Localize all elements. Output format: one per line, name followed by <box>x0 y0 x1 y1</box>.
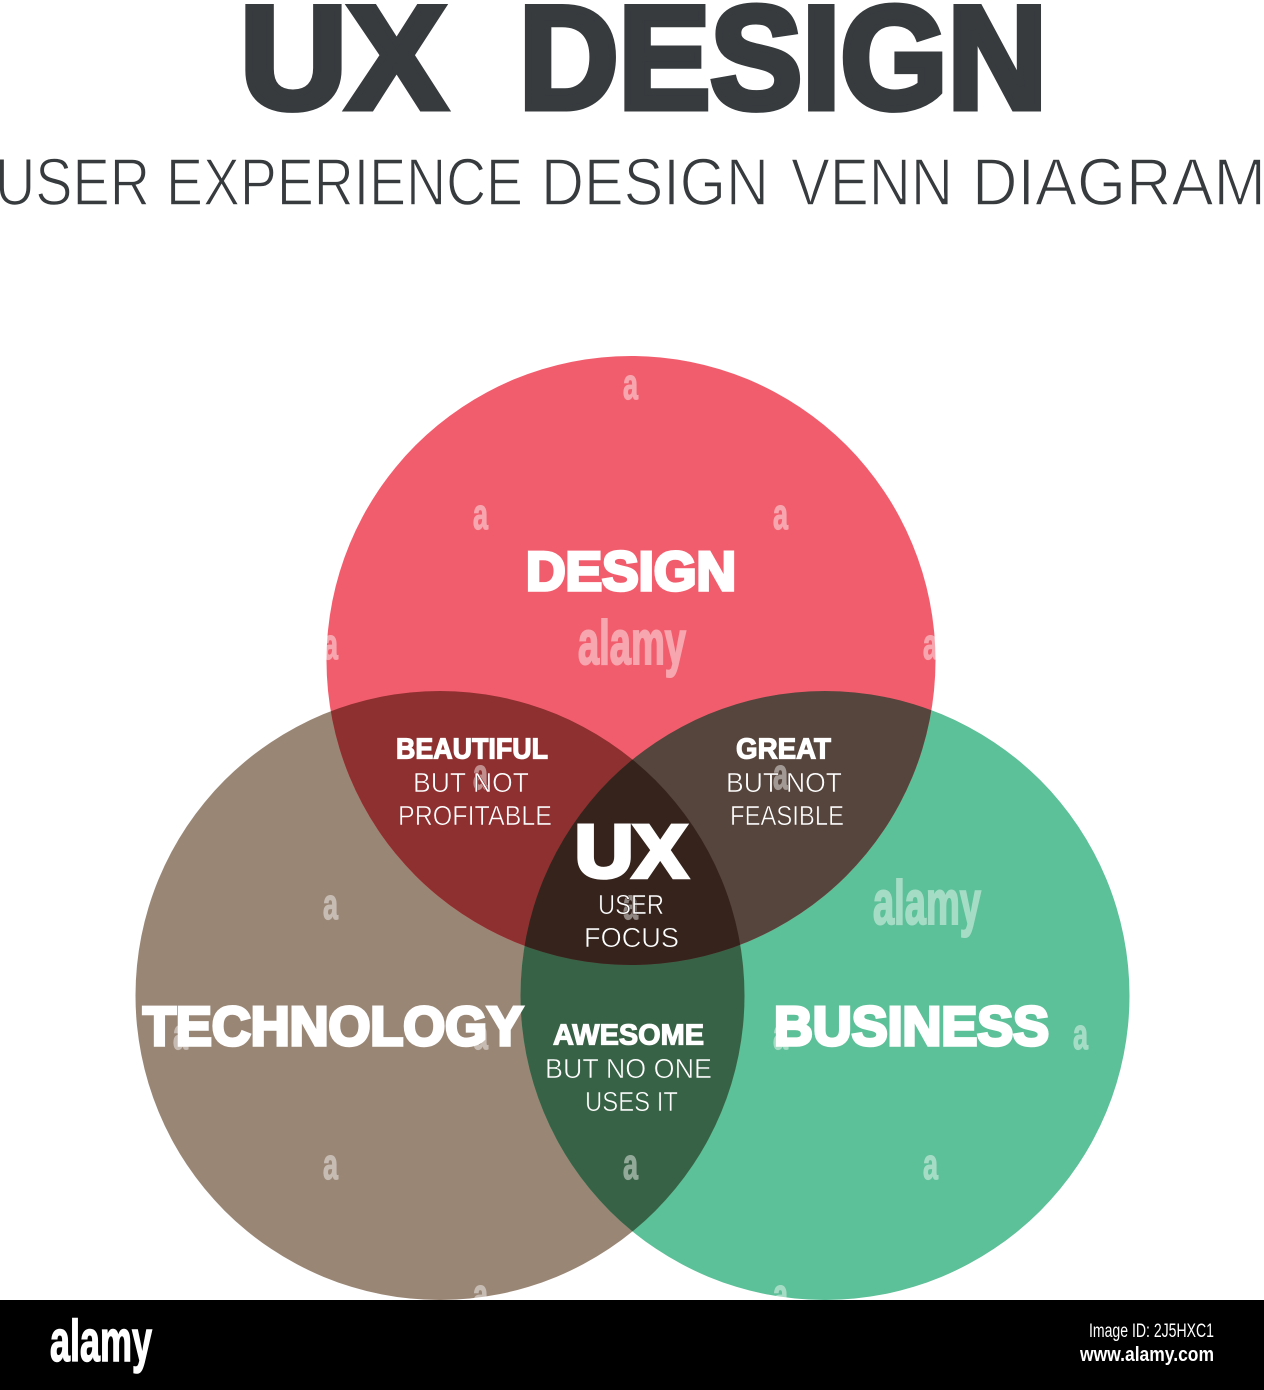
text: awesome but no one uses it: BUT NO ONE <box>545 1053 712 1084</box>
watermark pattern: alamy <box>578 609 686 678</box>
circle: business <box>520 691 1130 1300</box>
watermark pattern: a <box>473 1010 488 1059</box>
venn diagram <box>136 356 1130 1300</box>
text: UX user focus: UX <box>575 810 687 893</box>
watermark pattern: a <box>773 1010 788 1059</box>
text: UX user focus: FOCUS <box>584 922 679 953</box>
text: great but not feasible: FEASIBLE <box>730 800 844 831</box>
watermark pattern: a <box>473 750 488 799</box>
subtitle: USER <box>0 145 150 220</box>
watermark pattern: a <box>923 620 938 669</box>
subtitle: EXPERIENCE <box>166 145 523 220</box>
text: UX user focus <box>575 810 687 953</box>
text: awesome but no one uses it: USES IT <box>585 1086 678 1117</box>
watermark pattern: a <box>323 620 338 669</box>
subtitle <box>0 145 1264 220</box>
overlap: technology and business <box>520 944 744 1232</box>
watermark pattern: a <box>773 490 788 539</box>
label: business: BUSINESS <box>774 995 1049 1057</box>
watermark pattern <box>173 360 1088 1319</box>
label: design: DESIGN <box>526 540 736 602</box>
watermark pattern: a <box>923 1140 938 1189</box>
watermark pattern: a <box>623 1140 638 1189</box>
title <box>240 0 1047 139</box>
footer bar <box>0 1300 1264 1390</box>
watermark pattern: a <box>473 490 488 539</box>
text: beautiful but not profitable: BEAUTIFUL <box>396 734 548 766</box>
watermark pattern: alamy <box>873 869 981 938</box>
subtitle: DESIGN <box>541 145 769 220</box>
overlap: design and technology <box>330 691 739 965</box>
watermark pattern: a <box>323 880 338 929</box>
subtitle: VENN <box>791 145 953 220</box>
watermark pattern: a <box>773 1270 788 1319</box>
text: UX user focus: USER <box>598 889 664 920</box>
image id: Image ID: 2J5HXC1 <box>1089 1321 1214 1342</box>
website: www.alamy.com <box>1079 1344 1214 1366</box>
watermark pattern: a <box>773 750 788 799</box>
text: awesome but no one uses it <box>545 1020 712 1117</box>
text: awesome but no one uses it: AWESOME <box>553 1020 704 1052</box>
circle: technology <box>136 691 744 1300</box>
text: beautiful but not profitable <box>396 734 552 831</box>
watermark pattern: a <box>623 880 638 929</box>
watermark pattern: a <box>473 1270 488 1319</box>
overlap: design and business <box>524 691 932 946</box>
text: beautiful but not profitable: PROFITABLE <box>398 800 552 831</box>
text: great but not feasible: GREAT <box>736 734 831 766</box>
watermark pattern: a <box>1073 1010 1088 1059</box>
text: great but not feasible <box>726 734 844 831</box>
text: beautiful but not profitable: BUT NOT <box>413 767 529 798</box>
footer logo: alamy <box>50 1309 152 1374</box>
overlap: center UX <box>524 760 740 965</box>
watermark pattern: a <box>323 1140 338 1189</box>
watermark pattern: a <box>623 360 638 409</box>
watermark pattern: a <box>173 1010 188 1059</box>
text: great but not feasible: BUT NOT <box>726 767 842 798</box>
circle: design <box>326 356 936 965</box>
label: technology: TECHNOLOGY <box>143 995 523 1057</box>
